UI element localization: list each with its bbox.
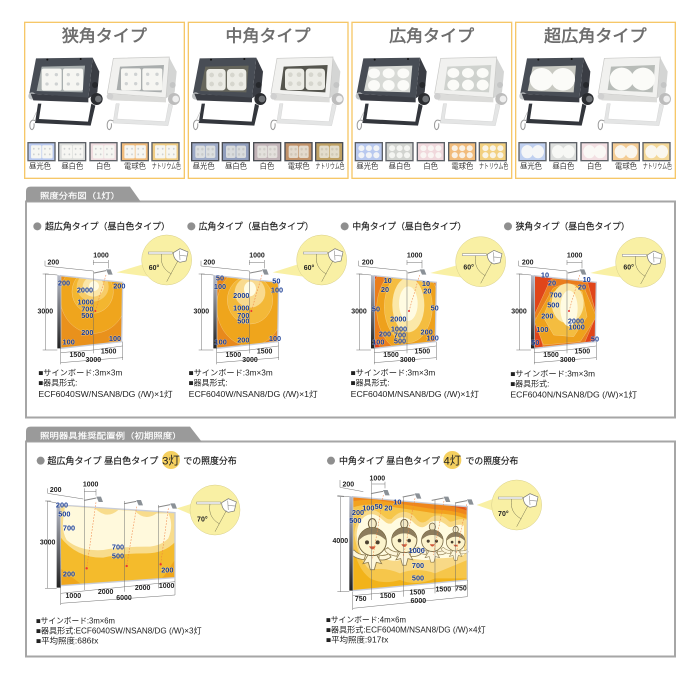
callout: 60 degrees	[117, 235, 192, 285]
spec text	[38, 369, 173, 399]
panel: extra-wide-angle type	[516, 22, 675, 178]
illuminance labels: 200	[161, 565, 173, 574]
swatch labels: wide-angle: 電球色	[451, 162, 473, 171]
characters: four mascots	[350, 519, 468, 570]
swatch labels: wide-angle: 昼白色	[389, 162, 411, 171]
contour map: 4 lamps	[353, 498, 467, 590]
spec text: ■平均照度:686ℓx	[36, 635, 98, 645]
illuminance labels: 1000	[569, 323, 585, 332]
spec text	[189, 369, 318, 399]
dimensions: 1500	[410, 590, 425, 597]
contour map: 3 lamps	[60, 506, 174, 585]
illuminance labels: 100	[215, 338, 227, 347]
illuminance labels: 700	[237, 311, 249, 320]
illuminance labels: 500	[81, 311, 93, 320]
dimensions: 3000	[86, 357, 101, 364]
dimensions: 2000	[98, 589, 114, 596]
illuminance labels: 500	[112, 551, 124, 560]
dimensions: 1000	[370, 476, 385, 483]
spec text: ECF6040M/NSAN8/DG (/W)×1灯	[351, 389, 479, 399]
contour map	[61, 276, 122, 348]
heading: extra-wide 3 lamps	[37, 451, 237, 469]
fixture pair: narrow-angle	[28, 57, 180, 130]
illuminance labels: 700	[394, 331, 406, 340]
dimensions: 3000	[194, 308, 209, 315]
illuminance labels: 1000	[409, 546, 425, 555]
spec text: ■器具形式:	[510, 378, 549, 388]
illuminance labels: 50	[531, 338, 539, 347]
spec text: ■サインボード:4m×6m	[326, 616, 406, 625]
section: layout, 3 lamps	[26, 427, 240, 645]
illuminance labels: 200	[421, 328, 433, 337]
dimensions: 3000	[351, 308, 367, 315]
illuminance labels: 1000	[391, 325, 407, 334]
illuminance labels: 2000	[568, 317, 584, 326]
tab: recommended layout heading: 照明器具推奨配置例（初期照度）	[40, 430, 182, 441]
dimensions: 1500	[383, 352, 399, 359]
colour swatches: wide-angle	[355, 142, 507, 161]
dimensions: 1000	[567, 252, 583, 259]
dimensions: 3000	[400, 357, 416, 364]
illuminance labels	[531, 271, 599, 347]
spec text: ■器具形式:ECF6040M/NSAN8/DG (/W)×4灯	[326, 625, 486, 635]
illuminance labels	[56, 500, 173, 578]
swatch labels: wide-angle: 白色	[423, 162, 438, 171]
dimensions: 200	[522, 259, 534, 266]
spec text: ■サインボード:3m×6m	[36, 616, 115, 625]
illuminance labels: 500	[237, 317, 249, 326]
heading bullet and title: 狭角タイプ（昼白色タイプ）	[516, 220, 630, 233]
illuminance labels: 100	[271, 286, 283, 295]
dimensions	[333, 476, 467, 605]
swatch labels: medium-angle: ナトリウム色	[316, 162, 345, 171]
dimensions: 4000	[333, 538, 348, 545]
swatch labels: extra-wide-angle: ナトリウム色	[643, 162, 672, 171]
illuminance labels	[214, 274, 283, 347]
illuminance labels: 50	[372, 305, 380, 314]
spec text: ECF6040SW/NSAN8/DG (/W)×1灯	[38, 389, 173, 399]
illuminance labels: 100	[362, 503, 374, 512]
swatch labels: medium-angle: 昼光色	[193, 162, 215, 171]
illuminance labels: 500	[58, 509, 70, 518]
illuminance labels: 2000	[77, 286, 93, 295]
heading bullet and title: 中角タイプ（昼白色タイプ）	[352, 220, 466, 233]
swatch labels: extra-wide-angle: 昼光色	[520, 162, 542, 171]
illuminance labels: 50	[431, 303, 439, 312]
contour map	[375, 276, 436, 348]
heading bullet and title: 超広角タイプ（昼白色タイプ）	[45, 220, 170, 233]
swatch labels: medium-angle: 白色	[260, 162, 274, 171]
swatch labels: wide-angle: ナトリウム色	[479, 162, 508, 171]
dimensions: 1500	[101, 349, 117, 356]
board and dimension lines	[45, 488, 177, 605]
illuminance labels: 200	[541, 312, 553, 321]
dimensions: 3000	[40, 540, 56, 547]
heading: medium-angle: 中角タイプ	[226, 23, 311, 47]
swatch labels: extra-wide-angle: 白色	[587, 162, 602, 171]
illuminance labels: 200	[56, 500, 68, 509]
illuminance labels: 50	[591, 335, 599, 344]
chart: medium type, 1 lamp	[341, 220, 506, 399]
dimensions: 1500	[415, 349, 430, 356]
colour swatches: medium-angle	[191, 142, 343, 161]
chart: wide type, 1 lamp	[187, 220, 347, 399]
illuminance labels: 1000	[78, 298, 94, 307]
dimensions: 1500	[226, 352, 241, 359]
spec text: ■器具形式:ECF6040SW/NSAN8/DG (/W)×3灯	[36, 625, 202, 635]
illuminance labels: 100	[536, 325, 548, 334]
spec text: ■器具形式:	[189, 378, 228, 388]
swatch labels: narrow-angle	[29, 162, 181, 171]
illuminance labels: 200	[352, 508, 364, 517]
dimensions: 6000	[116, 595, 132, 602]
panel: narrow-angle type	[25, 22, 184, 178]
spec text: ■サインボード:3m×3m	[189, 369, 273, 378]
heading: extra-wide-angle: 超広角タイプ	[544, 23, 647, 47]
heading: extra-wide 3 lamps: での照度分布	[183, 455, 237, 466]
illuminance labels: 700	[63, 523, 75, 532]
callout: 60 degrees: 60°	[149, 264, 159, 272]
dimensions: 1000	[66, 593, 81, 600]
dimensions: 2000	[135, 585, 151, 592]
dimensions: 1500	[543, 352, 559, 359]
illuminance labels: 10	[393, 497, 401, 506]
board and dimension lines	[337, 480, 474, 610]
illuminance labels: 200	[379, 329, 391, 338]
heading: narrow-angle: 狭角タイプ	[62, 23, 147, 47]
spec text	[351, 369, 479, 399]
swatch labels: extra-wide-angle	[520, 162, 672, 171]
illuminance labels: 10	[541, 271, 549, 280]
illuminance labels: 10	[583, 275, 591, 284]
swatch labels: medium-angle: 電球色	[288, 162, 310, 171]
tab: recommended layout heading	[26, 427, 202, 442]
dimensions: 200	[50, 487, 62, 494]
illuminance labels: 20	[548, 279, 556, 288]
spec text: ECF6040W/NSAN8/DG (/W)×1灯	[189, 389, 318, 399]
dimensions	[511, 252, 590, 364]
illuminance labels: 100	[372, 338, 384, 347]
spec text: ■サインボード:3m×3m	[351, 369, 436, 378]
illuminance labels: 700	[112, 542, 124, 551]
callout: 70 degrees	[177, 485, 240, 535]
dimensions	[38, 252, 117, 364]
heading: wide-angle: 広角タイプ	[389, 23, 475, 47]
spec text: ■サインボード:3m×3m	[510, 369, 595, 378]
section: layout, 4 lamps	[326, 451, 542, 645]
dimensions: 3000	[511, 308, 527, 315]
callout: 60 degrees	[590, 237, 666, 287]
dimensions: 3000	[38, 308, 53, 315]
dimensions: 750	[455, 586, 467, 593]
fixture pair: extra-wide-angle	[519, 57, 671, 130]
callout: 60 degrees	[430, 237, 506, 287]
illuminance labels: 2000	[233, 291, 249, 300]
dimensions: 1500	[575, 349, 590, 356]
dimensions: 1000	[407, 252, 423, 259]
illuminance labels: 500	[547, 301, 559, 310]
fixture pair: medium-angle	[192, 57, 344, 130]
callout: 70 degrees: 70°	[197, 516, 208, 524]
illuminance labels: 200	[237, 336, 249, 345]
fixture pair: wide-angle	[356, 57, 507, 130]
illuminance labels: 500	[349, 516, 361, 525]
callout: 60 degrees	[273, 235, 347, 285]
heading: medium 4 lamps: 中角タイプ 昼白色タイプ	[339, 455, 440, 466]
illuminance labels: 500	[394, 337, 406, 346]
panel: illuminance distribution frame	[26, 202, 675, 418]
illuminance labels	[372, 276, 439, 347]
callout: 60 degrees: 60°	[623, 264, 634, 272]
dimensions: 1500	[257, 349, 273, 356]
spec text: ■器具形式:	[351, 378, 390, 388]
spec text	[326, 616, 486, 645]
spec text: ■サインボード:3m×3m	[38, 369, 123, 378]
illuminance labels: 100	[427, 334, 439, 343]
swatch labels: narrow-angle: 昼白色	[61, 162, 83, 171]
heading: extra-wide 3 lamps: 超広角タイプ 昼白色タイプ	[47, 455, 158, 466]
dimensions: 200	[48, 259, 59, 266]
tab: illuminance distribution heading	[26, 187, 141, 202]
illuminance labels: 100	[214, 282, 226, 291]
illuminance labels: 10	[384, 276, 392, 285]
illuminance labels: 100	[109, 334, 121, 343]
swatch labels: wide-angle	[356, 162, 508, 171]
dimensions	[351, 252, 430, 364]
illuminance labels: 200	[58, 279, 70, 288]
illuminance labels: 50	[375, 502, 383, 511]
illuminance labels: 500	[412, 573, 424, 582]
dimensions: 3000	[242, 357, 258, 364]
illuminance labels: 20	[423, 287, 431, 296]
heading: extra-wide 3 lamps: 3灯	[162, 454, 180, 467]
dimensions: 200	[343, 482, 354, 489]
contour map	[217, 276, 278, 348]
panel: wide-angle type	[352, 22, 512, 178]
panel: recommended layout frame	[26, 442, 675, 656]
panel: medium-angle type	[188, 22, 348, 178]
spec text	[36, 616, 202, 645]
illuminance labels: 700	[412, 561, 424, 570]
callout: 70 degrees	[477, 480, 542, 530]
dimensions: 1000	[249, 252, 265, 259]
spec text: ECF6040N/NSAN8/DG (/W)×1灯	[510, 389, 637, 399]
callout: 60 degrees: 60°	[304, 264, 314, 272]
dimensions	[194, 252, 273, 364]
callout: 60 degrees: 60°	[463, 264, 474, 272]
dimensions: 3000	[560, 357, 576, 364]
illuminance labels: 20	[578, 283, 586, 292]
heading: medium 4 lamps: 4灯	[444, 454, 461, 467]
contour map	[535, 276, 596, 348]
dimensions	[40, 482, 175, 602]
illuminance labels	[349, 497, 425, 582]
illuminance labels: 2000	[390, 315, 406, 324]
illuminance labels	[58, 279, 125, 346]
dimensions: 1500	[70, 352, 85, 359]
illuminance labels: 700	[550, 291, 562, 300]
spec text: ■器具形式:	[38, 378, 77, 388]
swatch labels: narrow-angle: 白色	[96, 162, 111, 171]
illuminance labels: 200	[63, 569, 75, 578]
spec text	[510, 369, 637, 399]
dimensions: 1500	[436, 587, 451, 594]
callout: 70 degrees: 70°	[498, 510, 509, 518]
illuminance labels: 100	[63, 337, 75, 346]
spec text: ■平均照度:917ℓx	[326, 635, 388, 645]
colour swatches: narrow-angle	[27, 142, 180, 161]
dimensions: 200	[362, 259, 374, 266]
dimensions: 750	[355, 596, 367, 603]
chart: narrow type, 1 lamp	[504, 220, 666, 399]
dimensions: 6000	[411, 598, 426, 605]
swatch labels: narrow-angle: ナトリウム色	[152, 162, 181, 171]
illuminance labels: 50	[216, 274, 224, 283]
dimensions: 1000	[93, 252, 109, 259]
illuminance labels: 20	[381, 285, 389, 294]
swatch labels: narrow-angle: 昼光色	[29, 162, 51, 171]
heading bullet and title: 広角タイプ（昼白色タイプ）	[199, 220, 314, 233]
illuminance labels: 200	[81, 328, 93, 337]
swatch labels: wide-angle: 昼光色	[356, 162, 378, 171]
illuminance labels: 1000	[233, 304, 249, 313]
colour swatches: extra-wide-angle	[518, 142, 671, 161]
dimensions: 1500	[380, 593, 396, 600]
dimensions: 200	[204, 259, 215, 266]
illuminance labels: 20	[384, 503, 392, 512]
illuminance labels: 700	[81, 305, 93, 314]
tab: illuminance distribution heading: 照度分布図（1灯）	[40, 190, 120, 201]
chart: extra-wide type, 1 lamp	[33, 220, 192, 399]
swatch labels: medium-angle	[193, 162, 345, 171]
heading: medium 4 lamps: での照度分布	[466, 455, 518, 466]
illuminance labels: 50	[272, 277, 280, 286]
dimensions: 1000	[83, 482, 99, 489]
dimensions: 1000	[159, 583, 175, 590]
swatch labels: extra-wide-angle: 昼白色	[552, 162, 574, 171]
illuminance labels: 100	[269, 334, 281, 343]
illuminance labels: 200	[113, 282, 125, 291]
section: illuminance distribution	[26, 187, 666, 399]
illuminance labels: 10	[422, 279, 430, 288]
swatch labels: medium-angle: 昼白色	[225, 162, 247, 171]
swatch labels: extra-wide-angle: 電球色	[615, 162, 637, 171]
heading: medium 4 lamps	[327, 451, 518, 469]
swatch labels: narrow-angle: 電球色	[124, 162, 146, 171]
